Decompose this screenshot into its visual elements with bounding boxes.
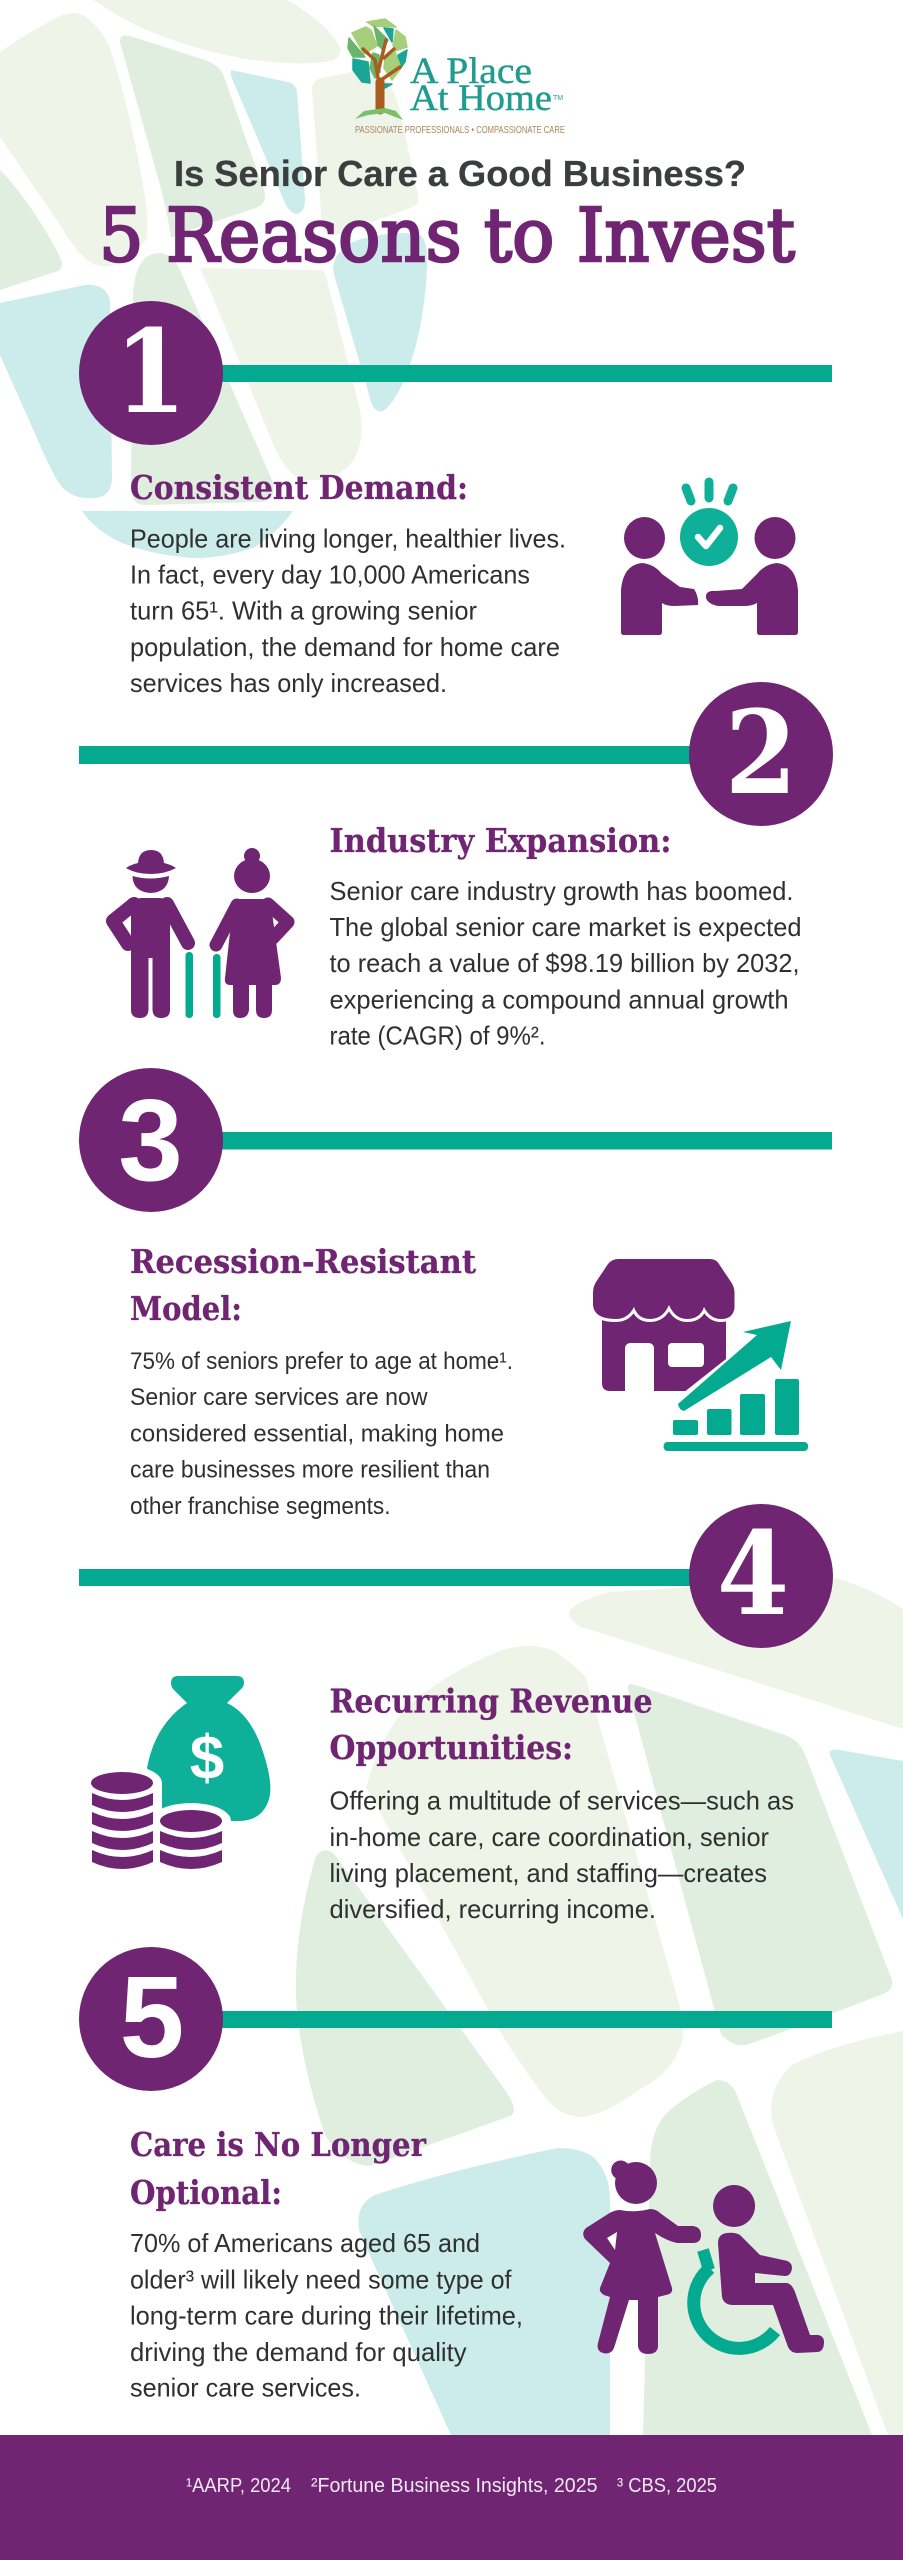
body text: diversified, recurring income. [330, 1894, 656, 1924]
body text: Senior care services are now [130, 1384, 428, 1411]
title: 5 Reasons to Invest [99, 193, 795, 279]
heading [130, 1242, 477, 1328]
body text: Offering a multitude of services—such as [330, 1786, 794, 1816]
body text: 70% of Americans aged 65 and [130, 2228, 480, 2258]
wordmark: A Place [410, 51, 532, 92]
body text: rate (CAGR) of 9%². [330, 1021, 546, 1051]
icon: handshake with check [621, 482, 798, 635]
heading [330, 1682, 652, 1767]
panel: industry expansion text [330, 821, 802, 1051]
footer band [0, 2435, 903, 2560]
body text: People are living longer, healthier lives. [130, 524, 566, 554]
divider 3 with number [79, 1068, 832, 1212]
divider 1 with number: 1 [114, 305, 186, 440]
body text: 75% of seniors prefer to age at home¹. [130, 1348, 513, 1375]
body text [330, 1786, 794, 1924]
panel: consistent demand text [130, 468, 566, 698]
body text [330, 876, 802, 1051]
heading [130, 2125, 427, 2212]
panel: recurring revenue text [330, 1682, 794, 1924]
icon: storefront with growth chart [593, 1259, 808, 1451]
body text [130, 2228, 523, 2403]
sources [186, 2475, 717, 2497]
body text: older³ will likely need some type of [130, 2265, 512, 2295]
divider 4 with number: 4 [717, 1507, 789, 1642]
body text: population, the demand for home care [130, 632, 560, 662]
heading: Care is No Longer [130, 2125, 427, 2164]
divider 2 with number [79, 682, 833, 826]
sources: ³ CBS, 2025 [617, 2475, 717, 2497]
heading: Recurring Revenue [330, 1682, 652, 1720]
heading: Model: [130, 1289, 242, 1328]
divider 4 with number [79, 1504, 833, 1648]
wordmark: At Home [410, 78, 552, 119]
icon: money bag and coins: $ [190, 1724, 224, 1793]
coin stacks [82, 1765, 231, 1871]
heading: Opportunities: [330, 1728, 573, 1767]
panel: recession-resistant text [130, 1242, 513, 1520]
body text: In fact, every day 10,000 Americans [130, 560, 530, 590]
heading: subtitle: Is Senior Care a Good Business? [174, 153, 746, 194]
heading: Optional: [130, 2173, 282, 2212]
body text: in-home care, care coordination, senior [330, 1822, 769, 1852]
logo: A Place At Home [348, 19, 565, 136]
icon: elderly couple with canes [113, 848, 288, 1018]
body text: other franchise segments. [130, 1493, 390, 1520]
body text: long-term care during their lifetime, [130, 2300, 523, 2330]
heading: Consistent Demand: [130, 468, 468, 507]
icon: tree [348, 19, 407, 120]
icon: caregiver and wheelchair [583, 2160, 824, 2354]
body text: considered essential, making home [130, 1420, 504, 1448]
heading: Recession-Resistant [130, 1242, 477, 1281]
tagline: PASSIONATE PROFESSIONALS • COMPASSIONATE CARE [355, 124, 565, 136]
wordmark: TM [553, 95, 563, 102]
sources: ¹AARP, 2024 [186, 2475, 291, 2497]
body text: experiencing a compound annual growth [330, 984, 788, 1014]
body text: The global senior care market is expected [330, 912, 802, 942]
body text: living placement, and staffing—creates [330, 1858, 767, 1888]
icon: money bag and coins [82, 1676, 270, 1871]
body text: to reach a value of $98.19 billion by 2032, [330, 948, 800, 978]
body text: turn 65¹. With a growing senior [130, 596, 477, 626]
divider 2 with number: 2 [725, 686, 797, 821]
panel: care is no longer optional text [130, 2125, 523, 2403]
body text: Senior care industry growth has boomed. [330, 876, 794, 906]
body text [130, 524, 566, 698]
body text: senior care services. [130, 2373, 361, 2403]
divider 5 with number: 5 [120, 1952, 184, 2082]
divider 3 with number: 3 [118, 1075, 183, 1205]
body text: driving the demand for quality [130, 2337, 467, 2367]
divider 5 with number [79, 1947, 832, 2091]
body text: services has only increased. [130, 668, 447, 698]
body text [130, 1348, 513, 1520]
wordmark [410, 51, 563, 119]
body text: care businesses more resilient than [130, 1457, 490, 1484]
sources: ²Fortune Business Insights, 2025 [311, 2475, 598, 2497]
heading: Industry Expansion: [330, 821, 672, 860]
divider 1 with number [79, 301, 832, 445]
